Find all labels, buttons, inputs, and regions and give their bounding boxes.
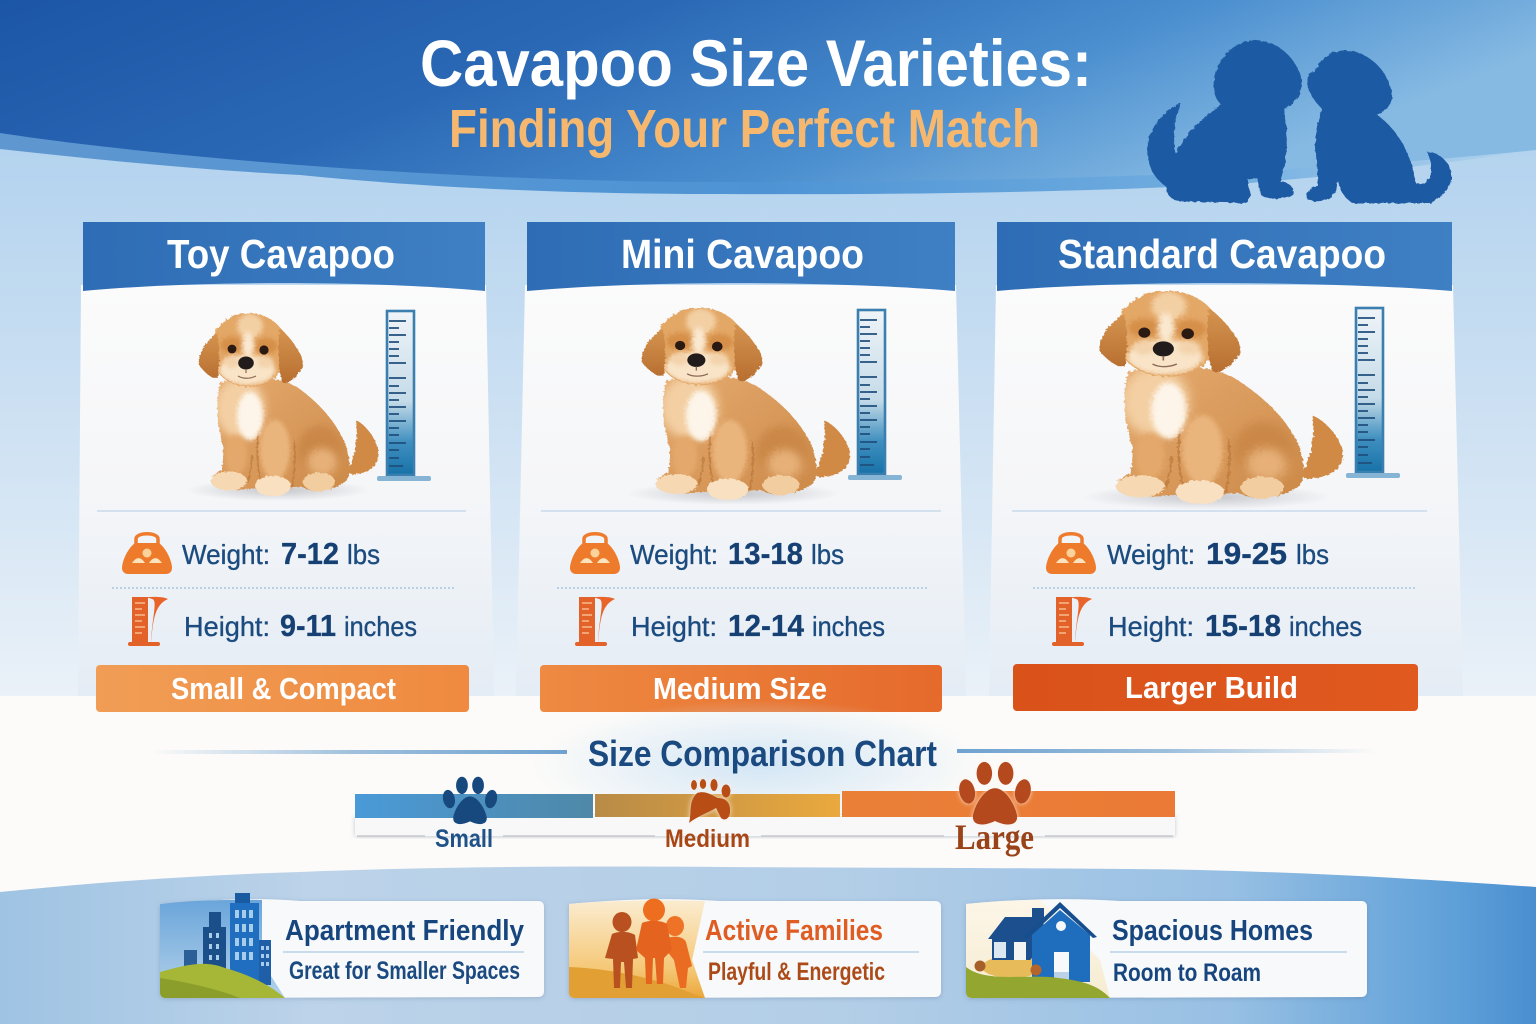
- size tag: [96, 665, 469, 712]
- weight text: lbs: [1296, 539, 1329, 570]
- panel: Standard Cavapoo: [989, 222, 1463, 711]
- icon: house: [966, 900, 1110, 998]
- height ruler: [848, 310, 902, 480]
- card: [966, 899, 1367, 998]
- weight text: 19-25: [1206, 536, 1287, 571]
- weight text: Weight:: [182, 539, 270, 570]
- height text: inches: [1289, 611, 1362, 642]
- card heading band: [997, 222, 1452, 291]
- height text: Height:: [184, 611, 270, 642]
- height text: 15-18: [1205, 608, 1281, 643]
- icon: city skyline: [160, 893, 285, 998]
- height text: Height:: [631, 611, 717, 642]
- title: [420, 26, 1092, 159]
- height text: inches: [344, 611, 417, 642]
- card heading band: [83, 222, 485, 291]
- panel: Apartment Friendly: [160, 893, 544, 998]
- height text: inches: [812, 611, 885, 642]
- weight text: Weight:: [1107, 539, 1195, 570]
- label: large: Large: [955, 817, 1034, 857]
- card: [160, 899, 544, 998]
- icon: small paw: [441, 777, 499, 824]
- height icon: [128, 597, 168, 646]
- panel: Active Families: [569, 898, 941, 998]
- label: small: Small: [435, 825, 493, 853]
- card body: [989, 285, 1463, 696]
- puppy photo: [627, 308, 851, 505]
- text: Great for Smaller Spaces: Great for Smaller Spaces: [289, 957, 520, 985]
- icon: medium paw: [689, 779, 730, 823]
- weight text: 7-12: [281, 536, 339, 571]
- scale track: [355, 815, 1175, 836]
- weight text: lbs: [811, 539, 844, 570]
- puppy photo: [186, 313, 379, 501]
- text: Active Families: Active Families: [705, 915, 883, 947]
- weight text: 13-18: [728, 536, 803, 571]
- text: Apartment Friendly: Apartment Friendly: [285, 915, 524, 947]
- header banner: [0, 0, 1536, 182]
- chart heading: Size Comparison Chart: [588, 733, 937, 774]
- size tag: [1013, 664, 1418, 711]
- text: Spacious Homes: Spacious Homes: [1112, 915, 1313, 947]
- weight text: Weight:: [630, 539, 718, 570]
- card body: [78, 285, 494, 696]
- icon: two puppy silhouettes: [1148, 42, 1450, 202]
- card heading: Mini Cavapoo: [621, 231, 864, 277]
- panel: Spacious Homes: [966, 899, 1367, 998]
- text: Room to Roam: Room to Roam: [1113, 959, 1261, 987]
- title line 2: Finding Your Perfect Match: [449, 99, 1040, 159]
- panel: Toy Cavapoo: [78, 222, 494, 712]
- large segment: [842, 791, 1175, 817]
- height ruler: [1346, 308, 1400, 478]
- height text: 12-14: [728, 608, 805, 643]
- weight icon: [570, 534, 620, 574]
- header band lower edge: [0, 0, 1536, 194]
- icon: large paw: [957, 762, 1033, 825]
- label: medium: Medium: [665, 825, 750, 853]
- card heading band: [527, 222, 955, 291]
- size tag text: Larger Build: [1125, 670, 1298, 705]
- size comparison chart: [150, 700, 1377, 857]
- text: Playful & Energetic: Playful & Energetic: [708, 958, 885, 986]
- card body: [516, 285, 966, 696]
- card heading: Toy Cavapoo: [167, 231, 395, 277]
- size tag text: Small & Compact: [171, 671, 396, 706]
- panel: Mini Cavapoo: [516, 222, 966, 712]
- height icon: [575, 597, 615, 646]
- height ruler: [377, 311, 431, 481]
- weight text: lbs: [347, 539, 380, 570]
- size tag text: Medium Size: [653, 671, 827, 706]
- puppy photo: [1082, 291, 1344, 510]
- small segment: [355, 794, 593, 818]
- card: [569, 899, 941, 998]
- height icon: [1052, 597, 1092, 646]
- height text: Height:: [1108, 611, 1194, 642]
- weight icon: [1046, 534, 1096, 574]
- title line 1: Cavapoo Size Varieties:: [420, 26, 1092, 100]
- bottom wave: [0, 867, 1536, 1024]
- height text: 9-11: [280, 608, 336, 643]
- weight icon: [122, 534, 172, 574]
- size tag: [540, 665, 942, 712]
- light blue mid section: [0, 130, 1536, 696]
- medium segment: [595, 794, 840, 817]
- icon: family: [569, 898, 705, 998]
- card heading: Standard Cavapoo: [1058, 231, 1386, 277]
